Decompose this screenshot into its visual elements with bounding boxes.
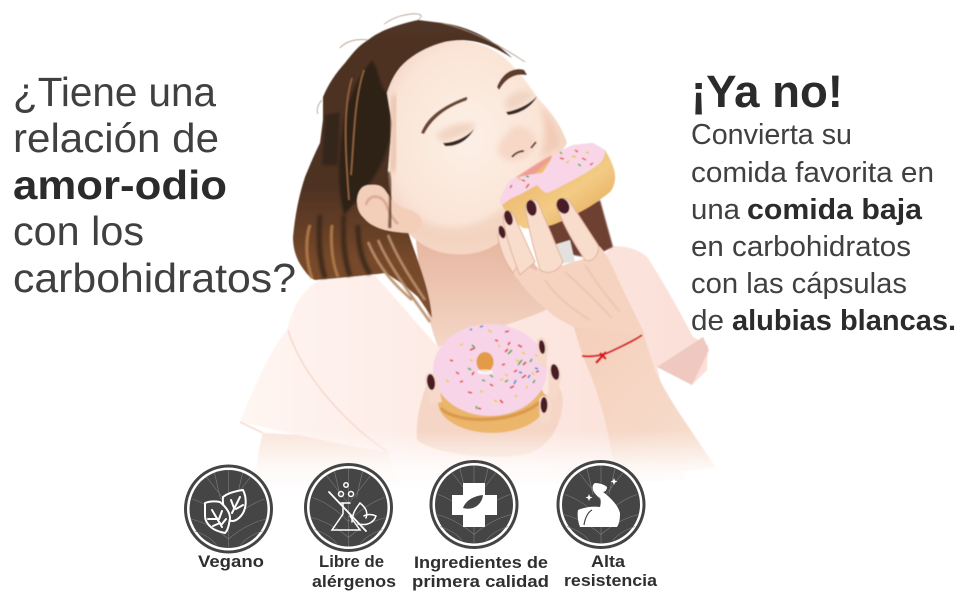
badge label: ingredientes de primera calidad: Ingredientes de bbox=[414, 554, 548, 572]
badge: alta resistencia bbox=[558, 462, 644, 548]
sleeve hem bbox=[657, 337, 709, 385]
badge label: ingredientes de primera calidad: primera calidad bbox=[412, 573, 549, 591]
right paragraph: con las cápsulas bbox=[691, 268, 907, 300]
badge: ingredientes de primera calidad bbox=[431, 462, 517, 548]
sprinkles bbox=[510, 150, 593, 188]
left arm bbox=[256, 433, 425, 488]
icon: sparkles bbox=[586, 478, 618, 501]
badge label: alta resistencia: Alta bbox=[591, 553, 626, 571]
shirt seams bbox=[240, 330, 388, 452]
hairline shadow bbox=[392, 95, 395, 172]
ring bbox=[537, 240, 575, 264]
bottom fade bbox=[220, 430, 750, 492]
right paragraph: Convierta su bbox=[691, 119, 852, 151]
icon: flexed arm bbox=[578, 483, 620, 527]
icon: cross with leaf bbox=[452, 483, 497, 527]
left headline: ¿Tiene una bbox=[13, 69, 216, 115]
badge label: libre de alérgenos bbox=[312, 553, 396, 591]
red bracelet bbox=[582, 335, 642, 356]
lower hand bbox=[417, 384, 563, 457]
badge label: libre de alérgenos: alérgenos bbox=[312, 573, 396, 591]
hair strand over ear bbox=[388, 172, 391, 228]
right heading: ¡Ya no! bbox=[691, 66, 843, 117]
hair bbox=[293, 14, 525, 322]
cheek and jaw shading bbox=[405, 205, 507, 248]
right paragraph bbox=[691, 119, 956, 337]
lower fingers bbox=[425, 337, 561, 426]
badge: vegano bbox=[186, 466, 272, 552]
nails: lower hand bbox=[426, 340, 561, 413]
closed eyes bbox=[443, 129, 474, 146]
forearm bbox=[573, 325, 716, 478]
icing bbox=[500, 143, 605, 205]
icon: flask with leaves, crossed bbox=[329, 483, 376, 531]
neck bbox=[415, 228, 548, 347]
badge label: alta resistencia: resistencia bbox=[564, 572, 658, 590]
right paragraph: comida baja bbox=[747, 194, 923, 226]
right paragraph: una bbox=[691, 194, 741, 226]
shadow behind fingers bbox=[540, 200, 613, 258]
top doughnut bbox=[500, 143, 615, 228]
right paragraph: en carbohidratos bbox=[691, 231, 911, 263]
sprinkles bbox=[446, 326, 539, 409]
lower doughnut bbox=[433, 324, 547, 433]
badge label: alta resistencia bbox=[564, 553, 658, 590]
face bbox=[387, 41, 567, 254]
nose bbox=[497, 126, 537, 161]
right paragraph: de bbox=[691, 305, 724, 337]
photo: woman eating doughnuts bbox=[240, 14, 716, 490]
badge label: vegano: Vegano bbox=[198, 553, 264, 571]
badge: libre de alérgenos bbox=[306, 464, 392, 550]
badge label: ingredientes de primera calidad bbox=[412, 554, 549, 591]
right paragraph: comida favorita en bbox=[691, 157, 934, 189]
fingers bbox=[498, 198, 598, 275]
left headline: con los bbox=[13, 208, 144, 254]
badge label: libre de alérgenos: Libre de bbox=[319, 553, 384, 571]
hand tendons bbox=[545, 265, 620, 320]
right paragraph: alubias blancas. bbox=[732, 305, 956, 337]
left headline: carbohidratos? bbox=[13, 255, 296, 301]
left headline bbox=[13, 69, 296, 301]
lips bbox=[515, 155, 552, 178]
ear bbox=[357, 185, 422, 233]
left headline: amor-odio bbox=[13, 162, 227, 208]
icon: two leaves bbox=[205, 490, 246, 533]
nails: upper hand bbox=[497, 196, 572, 239]
hand bbox=[499, 240, 645, 335]
eyebrows bbox=[421, 97, 467, 134]
eyelids bbox=[436, 123, 476, 141]
left headline: relación de bbox=[13, 115, 219, 161]
t-shirt bbox=[240, 246, 708, 490]
